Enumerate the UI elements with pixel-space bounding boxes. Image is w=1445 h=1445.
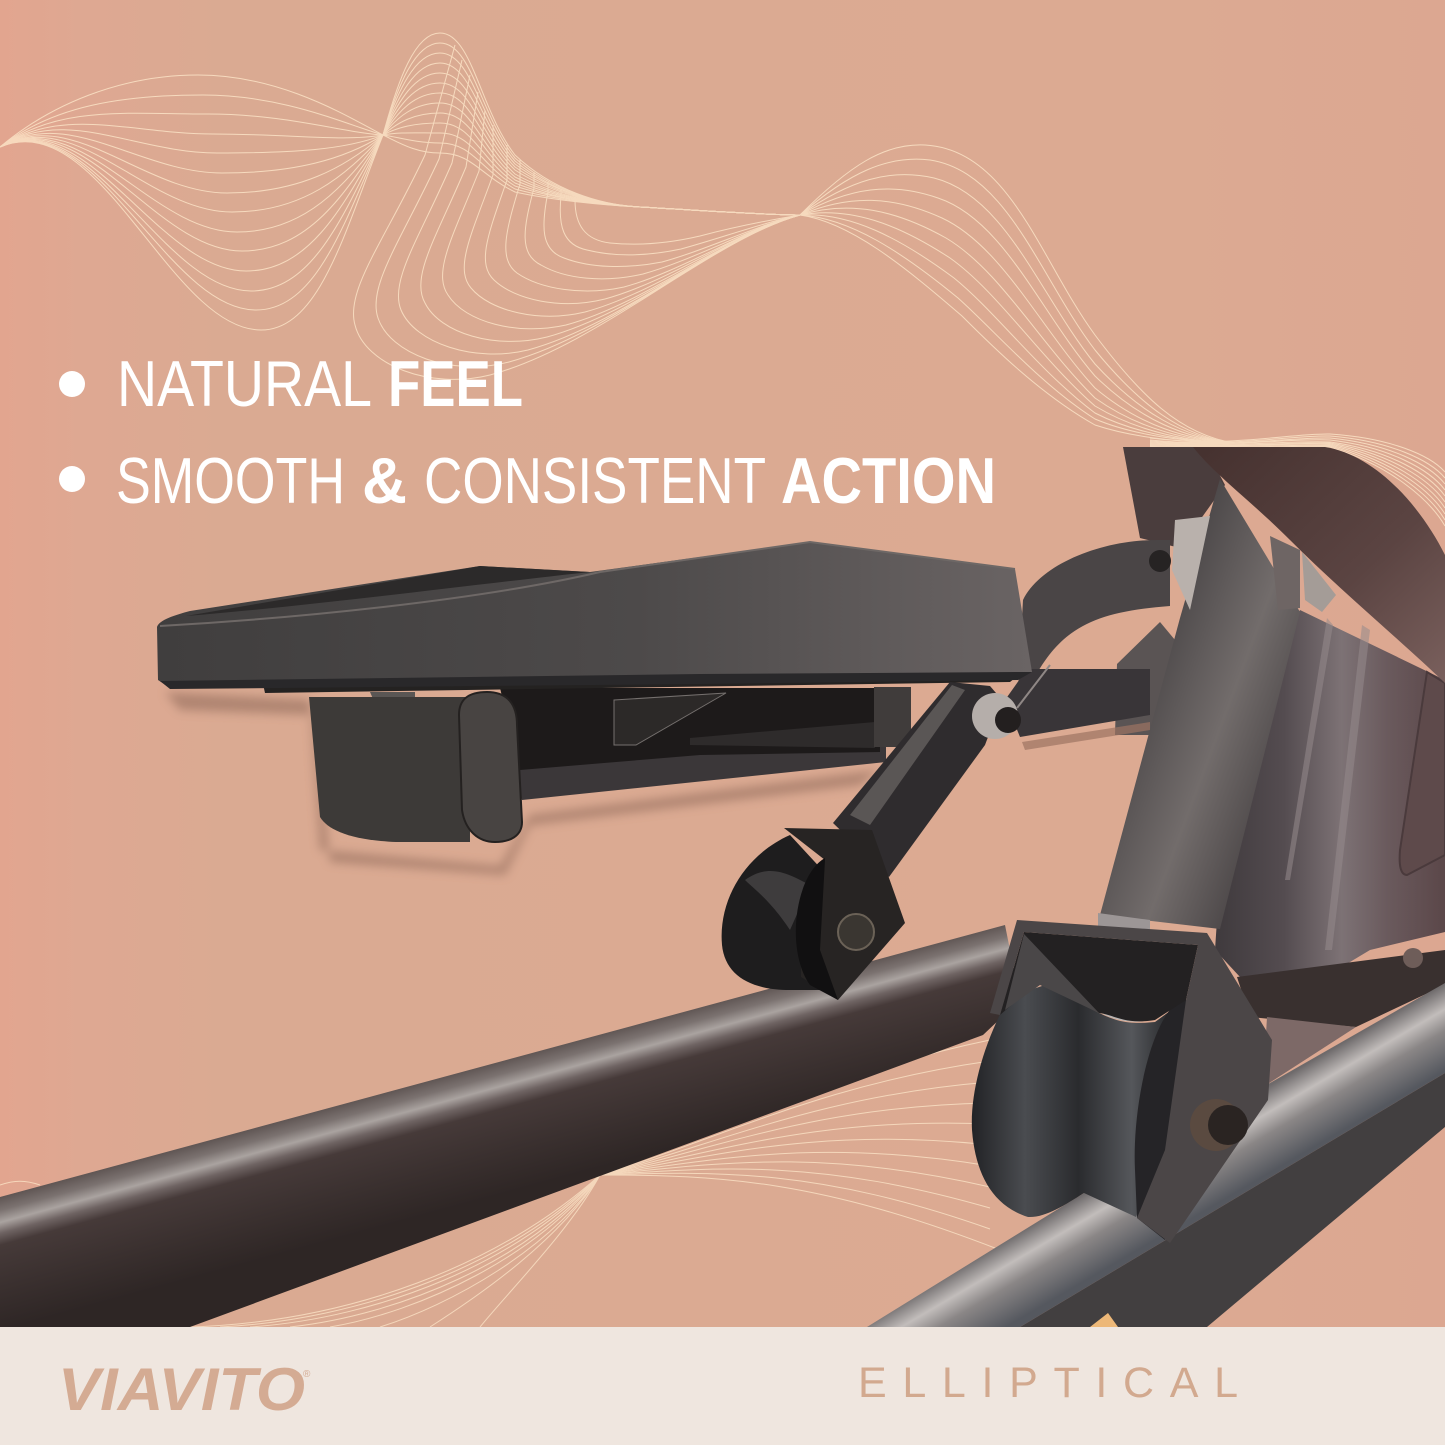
pedal lower plate xyxy=(263,674,1020,693)
main rail xyxy=(0,925,1020,1327)
housing panel detail xyxy=(1400,672,1445,875)
text: natural feel: FEEL xyxy=(388,347,523,420)
registered mark: ® xyxy=(303,1369,311,1380)
base bolt xyxy=(1403,948,1423,968)
small roller xyxy=(722,835,850,990)
big roller bracket xyxy=(990,920,1272,1243)
side housing xyxy=(1215,610,1445,977)
bullet list xyxy=(59,347,996,517)
pedal arm xyxy=(833,682,1002,877)
horizontal link bar xyxy=(1005,669,1150,737)
text: natural feel: NATURAL xyxy=(117,347,372,420)
pedal body xyxy=(157,542,1032,688)
pedal bracket hardware xyxy=(500,688,880,770)
bracket end box xyxy=(874,687,911,747)
footer band xyxy=(0,1327,1445,1445)
small roller rim xyxy=(796,858,838,1000)
pedal top surface xyxy=(186,566,590,616)
left hinge bolt xyxy=(1149,516,1210,610)
pedal shadow xyxy=(165,692,880,875)
bullet: natural feel xyxy=(59,371,85,397)
rear bracket xyxy=(1115,622,1175,735)
pedal under bar xyxy=(505,745,886,800)
big roller xyxy=(972,985,1185,1217)
lower right rail tube xyxy=(867,983,1445,1327)
bracket cross tube xyxy=(690,722,875,748)
pivot bolt xyxy=(972,693,1018,739)
right hinge bolt xyxy=(1270,536,1336,612)
text: smooth and consistent action: CONSISTENT xyxy=(424,444,766,517)
product label: ELLIPTICAL xyxy=(858,1359,1238,1407)
small roller highlight xyxy=(745,871,810,930)
upright post xyxy=(1100,479,1300,929)
tube link wire xyxy=(1017,665,1050,708)
post weld xyxy=(1098,913,1150,930)
seat or rear cover xyxy=(1193,447,1445,683)
big roller highlight xyxy=(1098,1005,1155,1022)
arm highlight xyxy=(850,685,965,825)
bracket gusset xyxy=(614,693,726,745)
brand logo: VIAVITO xyxy=(58,1356,305,1423)
small roller bracket xyxy=(784,828,905,1000)
decorative wave lines: lower xyxy=(0,1040,1000,1327)
big roller rim xyxy=(1135,1000,1190,1240)
pedal lower edge xyxy=(160,672,1032,689)
rubber end block xyxy=(309,697,470,842)
bracket inner xyxy=(1000,932,1198,1021)
curved connecting tube xyxy=(1018,540,1170,690)
frame inner panel xyxy=(1263,1017,1356,1087)
sticker tip xyxy=(1090,1313,1118,1327)
small bracket clip xyxy=(370,692,415,715)
lower right rail dark face xyxy=(1020,1073,1445,1327)
text: smooth and consistent action: & xyxy=(362,444,407,517)
elliptical machine photo xyxy=(0,447,1445,1327)
bullet: smooth action xyxy=(59,466,85,492)
link bar shadow xyxy=(1022,722,1150,750)
bracket inner facet xyxy=(1005,934,1099,1013)
decorative wave lines: upper xyxy=(0,33,1445,526)
pedal rim highlight xyxy=(160,542,1015,626)
rear uprights xyxy=(1123,447,1225,548)
small roller bolt xyxy=(838,914,874,950)
housing vertical ribs xyxy=(1285,618,1370,950)
end block cap xyxy=(459,692,522,842)
frame base plate xyxy=(1237,950,1445,1027)
text: smooth and consistent action: ACTION xyxy=(781,444,996,517)
text: smooth and consistent action: SMOOTH xyxy=(116,444,345,517)
big roller bolt xyxy=(1190,1099,1248,1151)
